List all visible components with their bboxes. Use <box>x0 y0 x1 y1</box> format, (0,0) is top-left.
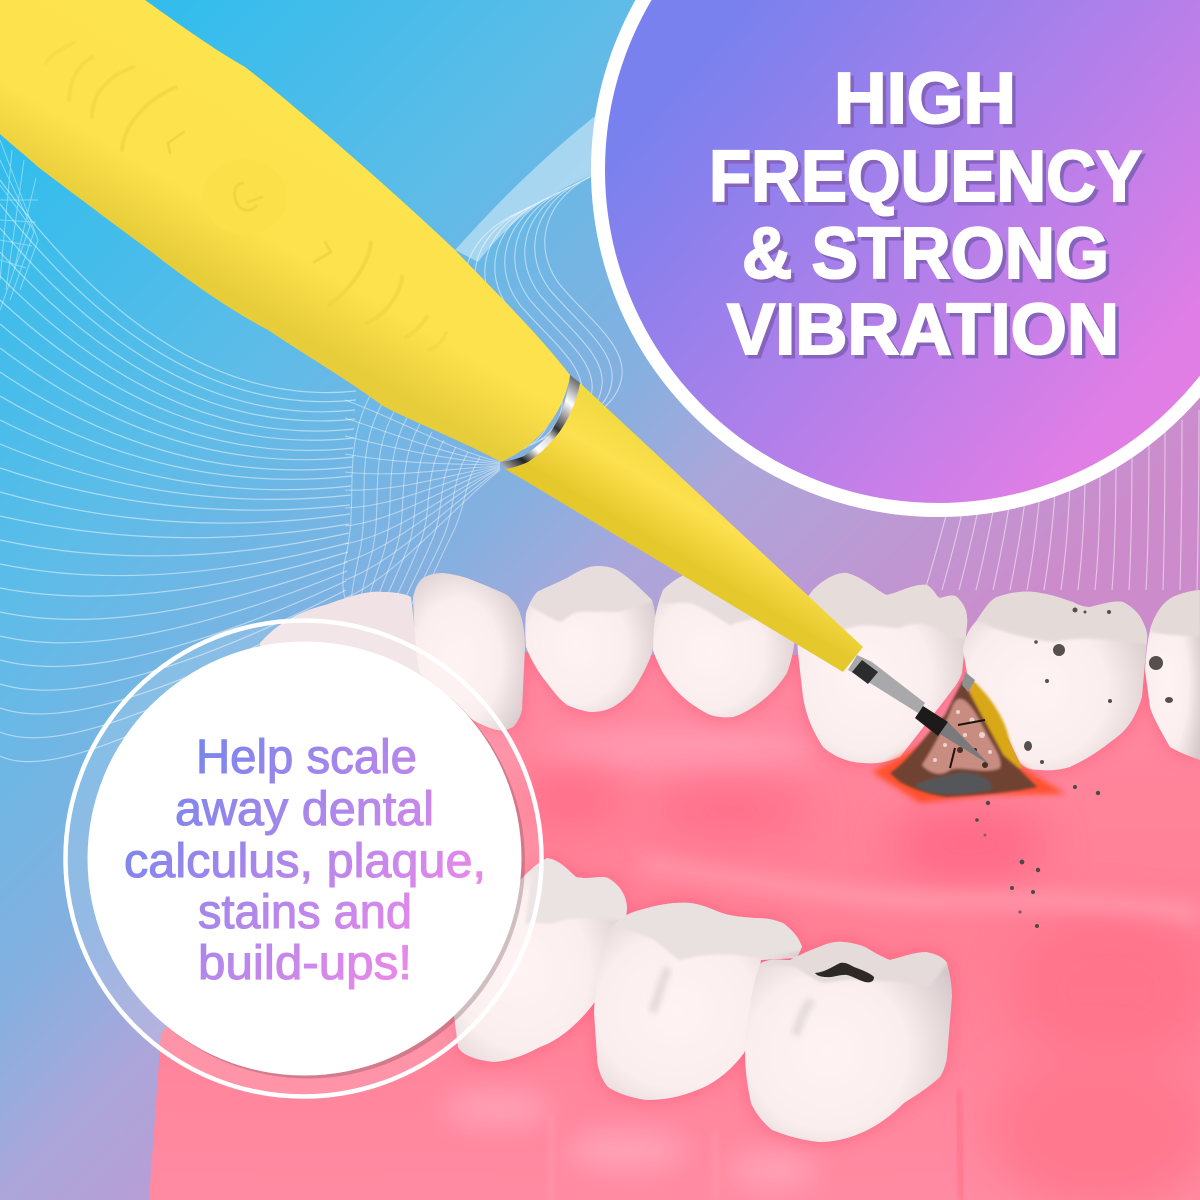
gums: upper and lower ridge <box>149 652 1200 1200</box>
tooth 4 <box>653 576 794 718</box>
pen tapered cone <box>505 383 863 672</box>
pen body <box>0 0 570 462</box>
tooth 6 with stains <box>963 585 1150 770</box>
headline text: VIBRATION <box>727 290 1119 370</box>
callout text: stains and <box>198 885 412 939</box>
headline text: & STRONG <box>742 214 1109 294</box>
lower tooth 1 <box>452 850 630 1062</box>
callout text: away dental <box>175 782 434 836</box>
tooth 3 <box>525 566 655 712</box>
wave lines: upper left mesh <box>0 140 38 310</box>
red glow around teeth <box>451 652 1196 1148</box>
headline text: HIGH <box>834 59 1016 139</box>
metal scaler tip <box>848 655 990 765</box>
pen chrome ring <box>501 375 580 469</box>
callout text <box>124 730 486 990</box>
lower tooth 3 with cavity <box>745 935 955 1142</box>
wave lines: mesh near pen ring <box>343 392 500 632</box>
headline circle <box>598 0 1200 510</box>
tooth 2 <box>413 573 525 730</box>
headline text: FREQUENCY <box>709 137 1142 217</box>
callout circle <box>66 620 542 1096</box>
callout text: Help scale <box>196 730 417 784</box>
headline text <box>709 59 1142 370</box>
callout text: build-ups! <box>198 936 412 990</box>
cavity <box>815 963 874 982</box>
tooth 5 <box>795 565 975 763</box>
wave lines: left arcs <box>0 180 356 762</box>
debris dots on gum <box>975 785 1100 928</box>
tartar deposit <box>872 672 1066 803</box>
wave lines: upper right translucent band <box>455 104 622 455</box>
gum shading: glows and folds <box>413 566 1200 1200</box>
pen button and grooves <box>46 43 446 350</box>
stain dots <box>1024 608 1112 764</box>
tooth 7 with stains <box>1145 590 1200 760</box>
lower teeth row <box>452 850 955 1142</box>
tooth 1 <box>260 592 470 760</box>
lower tooth 2 <box>594 900 805 1100</box>
callout text: calculus, plaque, <box>124 834 486 888</box>
wave lines: right fan on pink <box>925 410 1199 590</box>
upper teeth row <box>260 560 1200 770</box>
